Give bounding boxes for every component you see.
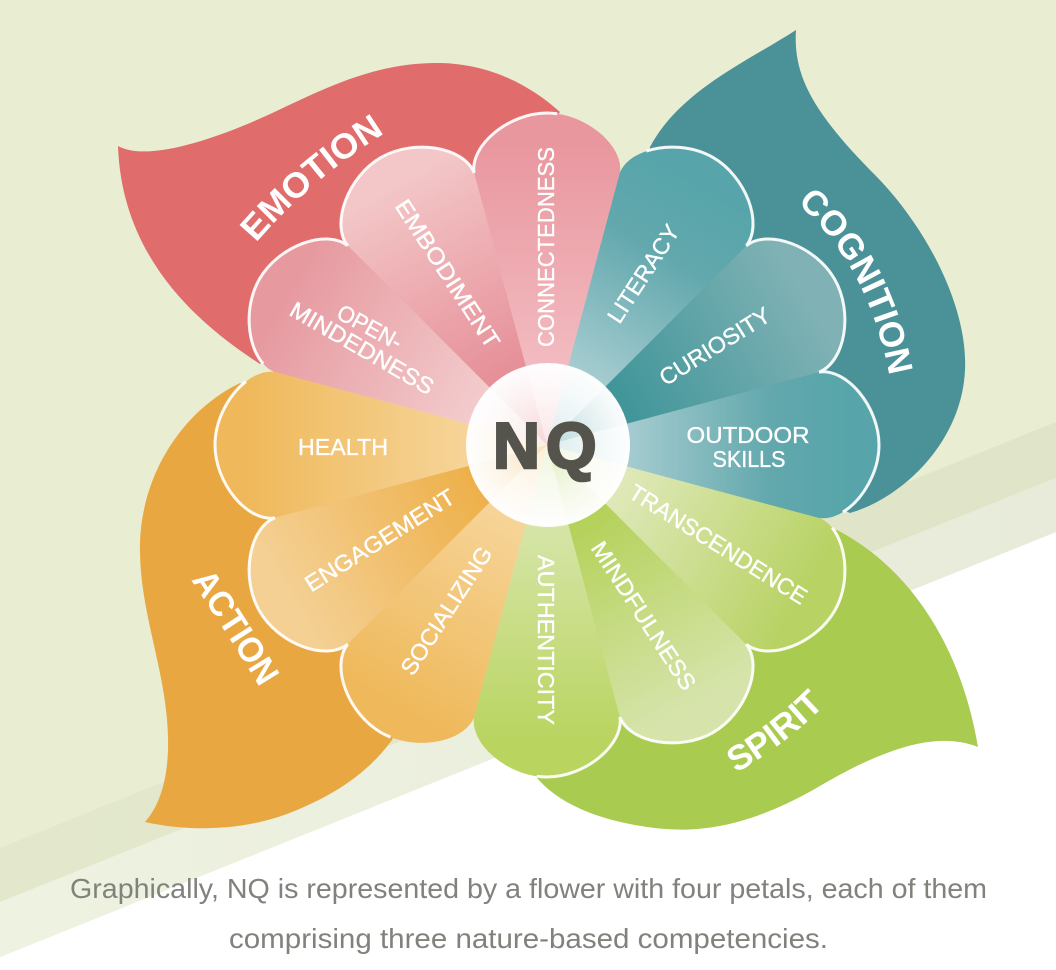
petal: Authenticity: AUTHENTICITY (533, 555, 559, 725)
petal: Mindfulness (484, 408, 776, 769)
petal: Transcendence (510, 382, 871, 674)
petal: Health (215, 372, 547, 518)
label: EMOTION: EMOTION (240, 114, 383, 241)
label: ACTION: ACTION (192, 574, 280, 686)
caption: comprising three nature-based competencies. (229, 923, 828, 954)
petal: Outdoor skills: SKILLS (712, 446, 786, 472)
petal: Engagement: ENGAGEMENT (300, 484, 460, 597)
petal: Connectedness: CONNECTEDNESS (533, 147, 559, 347)
label: SPIRIT: SPIRIT (728, 688, 819, 770)
leaf: Spirit (502, 530, 978, 830)
caption (70, 873, 987, 954)
petal: Open-mindedness: MINDEDNESS (285, 296, 439, 400)
label: COGNITION: COGNITION (802, 190, 913, 374)
petal: Open-mindedness (223, 216, 584, 508)
petal: Literacy: LITERACY (602, 220, 685, 328)
petal: Embodiment: EMBODIMENT (390, 194, 505, 353)
petal: Connectedness (474, 113, 620, 445)
petal: Mindfulness: MINDFULNESS (586, 536, 701, 695)
petal: Socializing (318, 408, 610, 769)
petal: Health: HEALTH (298, 434, 388, 460)
leaf: Emotion (118, 63, 560, 364)
petal: Embodiment (318, 121, 610, 482)
petal: Outdoor skills: OUTDOOR (686, 422, 810, 448)
petal: Socializing: SOCIALIZING (395, 542, 497, 680)
leaf: Cognition (606, 30, 966, 513)
center hub with NQ: NQ (493, 409, 597, 482)
petal: Transcendence: TRANSCENDENCE (624, 479, 812, 610)
petal: Open-mindedness: OPEN- (333, 299, 407, 355)
caption: Graphically, NQ is represented by a flower with four petals, each of them (70, 873, 987, 904)
petal: Curiosity: CURIOSITY (654, 302, 775, 391)
petal: Authenticity (474, 445, 620, 777)
petal: Outdoor skills (547, 372, 879, 518)
petal: Curiosity (510, 216, 871, 508)
leaf: Action (140, 383, 490, 828)
petal: Engagement (223, 382, 584, 674)
center hub with NQ (466, 363, 630, 527)
petal: Literacy (484, 121, 776, 482)
